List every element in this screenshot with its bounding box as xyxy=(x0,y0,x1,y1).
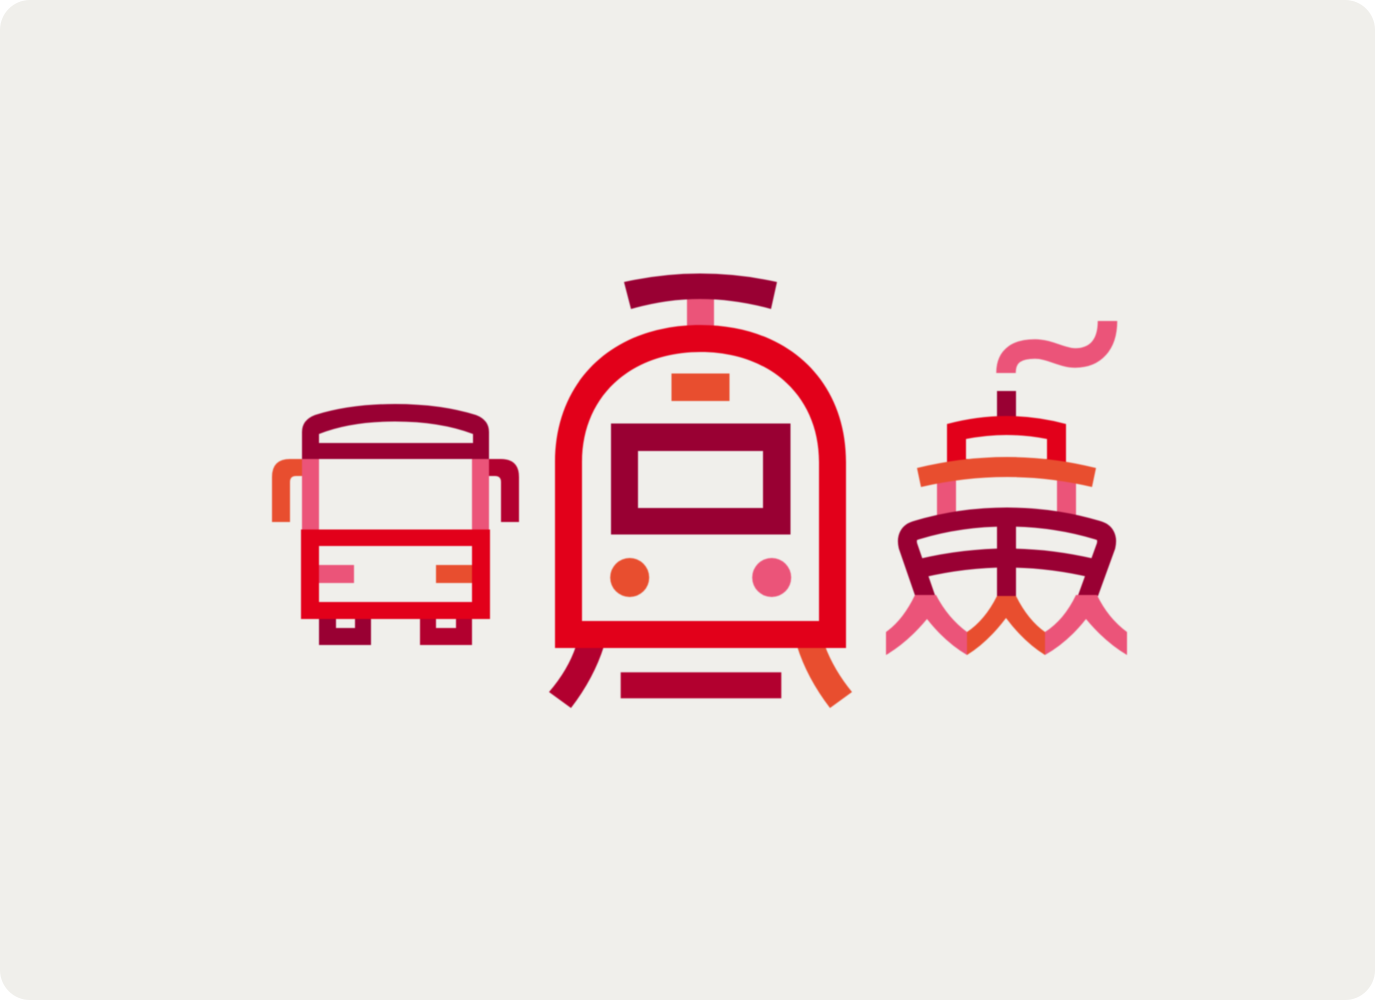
tram left rail xyxy=(549,646,604,708)
tram pantograph bar xyxy=(624,274,777,309)
bus right wheel xyxy=(420,619,472,645)
bus roof xyxy=(302,404,489,459)
ferry hull xyxy=(907,517,1107,604)
tram right rail xyxy=(797,646,852,708)
hull outline xyxy=(907,517,1107,604)
icon: ferry xyxy=(886,321,1127,655)
bus right lamp xyxy=(436,565,472,583)
bus front body xyxy=(301,530,490,619)
bus right mirror xyxy=(489,459,519,522)
right wave xyxy=(1045,595,1127,655)
tram windscreen xyxy=(611,424,790,534)
tram body xyxy=(555,325,846,648)
tram pantograph stem xyxy=(687,299,714,329)
bus left mirror xyxy=(272,459,302,522)
ferry upper cabin xyxy=(947,416,1066,462)
ferry deck xyxy=(917,457,1096,487)
hull centre post xyxy=(997,517,1016,597)
tram track sleeper xyxy=(621,672,781,698)
ferry funnel xyxy=(997,391,1016,418)
bus left wheel xyxy=(319,619,371,645)
bus right pillar xyxy=(472,459,489,530)
ferry left pillar xyxy=(937,480,956,518)
tram destination sign xyxy=(672,374,730,401)
tram left headlight xyxy=(610,558,649,597)
icon: bus xyxy=(272,404,519,645)
ferry right pillar xyxy=(1057,480,1076,518)
left wave xyxy=(886,595,967,655)
bus left pillar xyxy=(302,459,319,530)
bus left lamp xyxy=(319,565,354,583)
icon: tram xyxy=(549,274,852,708)
hull cross band xyxy=(922,558,1092,568)
centre wave xyxy=(967,596,1045,655)
tram right headlight xyxy=(752,558,791,597)
ferry smoke xyxy=(1006,321,1108,373)
